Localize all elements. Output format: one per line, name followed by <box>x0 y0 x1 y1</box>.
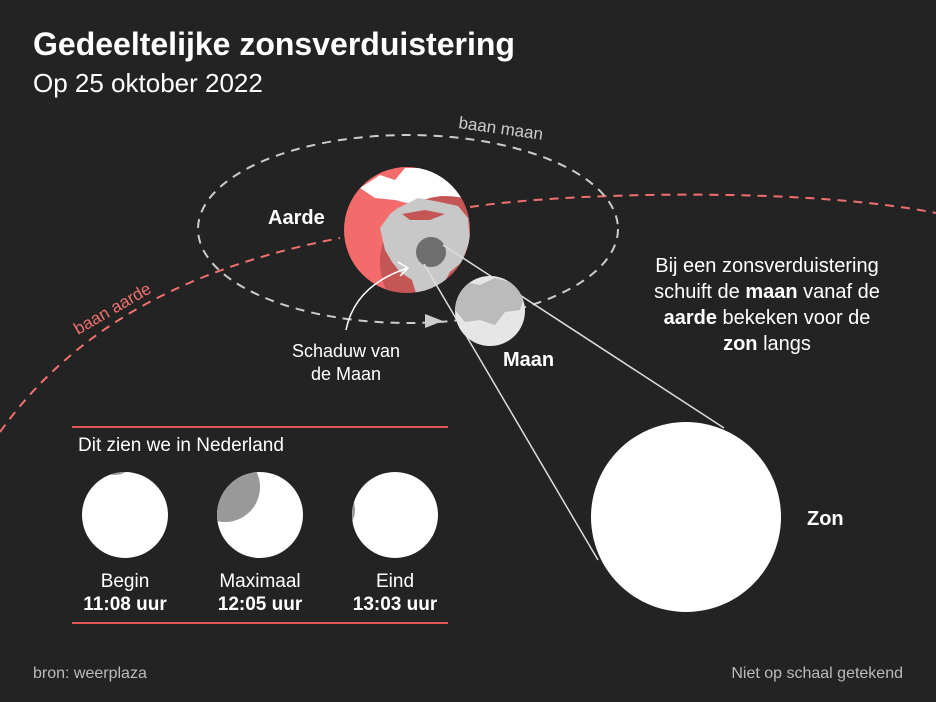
panel: Nederland: 12:05 uur <box>218 594 303 615</box>
subtitle: Op 25 oktober 2022 <box>33 68 263 98</box>
moon <box>455 276 525 346</box>
moon orbit <box>198 135 618 323</box>
phase: begin <box>82 472 168 558</box>
label: baan aarde: baan aarde <box>70 279 155 338</box>
source: bron: weerplaza <box>33 665 147 682</box>
panel: Nederland: Maximaal <box>219 571 301 592</box>
explanation text: schuift de maan vanaf de <box>654 281 880 303</box>
panel: Nederland: Dit zien we in Nederland <box>78 435 284 456</box>
phase: maximaal <box>217 472 303 558</box>
label: baan maan: baan maan <box>457 113 544 144</box>
label: Zon: Zon <box>807 508 844 530</box>
orbit arrowhead <box>425 314 443 328</box>
panel: Nederland: Begin <box>101 571 149 592</box>
panel: Nederland <box>72 427 448 623</box>
note: Niet op schaal getekend <box>731 665 903 682</box>
explanation text: Bij een zonsverduistering <box>655 255 879 277</box>
explanation text: zon langs <box>723 333 811 355</box>
label: Aarde: Aarde <box>268 207 325 229</box>
phase: eind <box>352 472 438 558</box>
arrow to shadow <box>346 262 408 330</box>
title: Gedeeltelijke zonsverduistering <box>33 26 515 62</box>
label: Schaduw van de Maan: de Maan <box>311 364 381 384</box>
panel: Nederland: Eind <box>376 571 414 592</box>
label: Schaduw van de Maan: Schaduw van <box>292 341 400 361</box>
shadow cone lines <box>424 245 724 560</box>
explanation text: aarde bekeken voor de <box>664 307 870 329</box>
sun <box>591 422 781 612</box>
panel: Nederland: 13:03 uur <box>353 594 438 615</box>
panel: Nederland: 11:08 uur <box>83 594 167 615</box>
earth <box>344 167 470 293</box>
earth orbit <box>0 195 936 432</box>
label: Maan: Maan <box>503 349 554 371</box>
moon shadow on earth <box>416 237 446 267</box>
